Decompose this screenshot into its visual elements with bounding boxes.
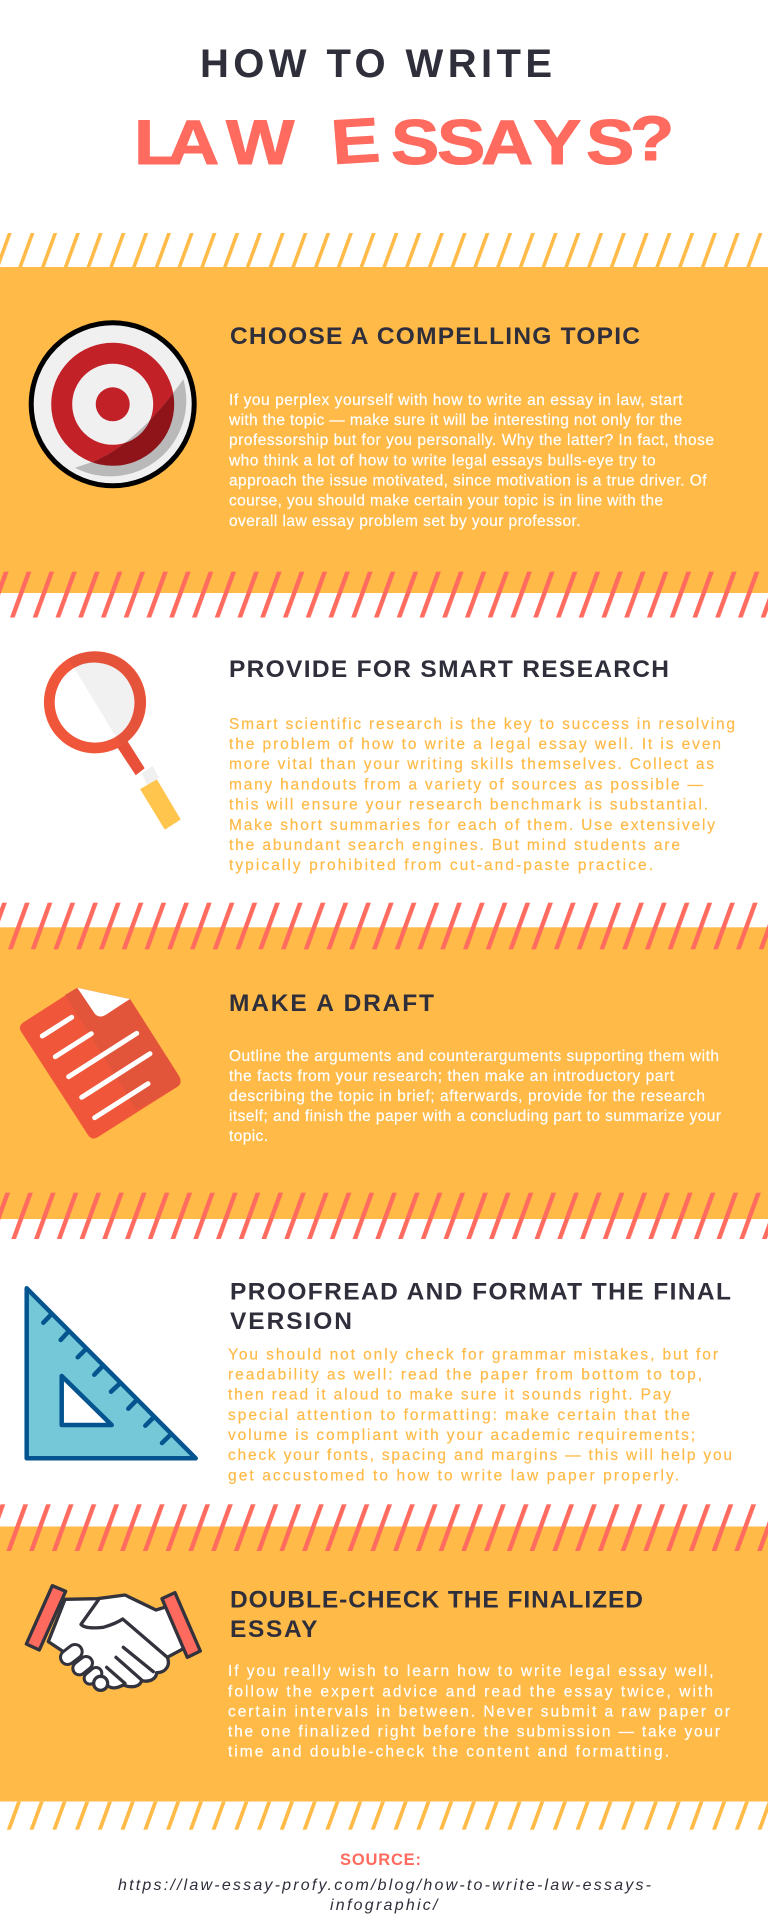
heading: PROVIDE FOR SMART RESEARCH [229,656,669,683]
body text [229,1048,721,1145]
icon: target [30,320,200,490]
icon: document [20,988,181,1139]
body text: Smart scientific research is the key to success in resolving [229,716,735,733]
icon: magnifying glass [49,657,180,829]
panel: make a draft [0,927,768,1219]
body text: the abundant search engines. But mind students are [229,837,680,854]
body text: more vital than your writing skills themselves. Collect as [229,756,714,773]
panel: proofread and format [27,1278,732,1484]
body text: You should not only check for grammar mistakes, but for [228,1346,718,1364]
body text: readability as well: read the paper from bottom to top, [228,1366,702,1384]
panel: provide for smart research [49,656,735,874]
body text: typically prohibited from cut-and-paste practice. [229,857,653,874]
title [134,42,674,178]
body text: If you really wish to learn how to write legal essay well, [228,1663,714,1680]
body text: special attention to formatting: make certain that the [228,1407,690,1424]
body text: then read it aloud to make sure it sounds right. Pay [228,1386,671,1404]
body text: who think a lot of how to write legal essays bulls-eye try to [228,452,656,470]
heading: PROOFREAD AND FORMAT THE FINAL [230,1278,731,1306]
body text [228,1663,730,1760]
source url: https://law-essay-profy.com/blog/how-to-write-law-essays- [118,1877,651,1894]
heading: MAKE A DRAFT [229,990,434,1017]
body text: this will ensure your research benchmark is substantial. [229,796,708,814]
body text: volume is compliant with your academic requirements; [228,1427,695,1444]
body text [229,716,735,874]
body text: overall law essay problem set by your professor. [229,513,581,530]
heading: CHOOSE A COMPELLING TOPIC [230,323,640,350]
body text: If you perplex yourself with how to write an essay in law, start [229,392,683,409]
title line: law essays: LAW ESSAYS? [134,104,674,178]
body text [228,392,714,530]
panel: choose a compelling topic [0,267,768,593]
body text: itself; and finish the paper with a concluding part to summarize your [229,1108,721,1125]
source label: SOURCE: [340,1851,421,1869]
body text: get accustomed to how to write law paper properly. [228,1468,679,1484]
body text: the facts from your research; then make an introductory part [229,1068,675,1085]
source url: infographic/ [330,1897,439,1914]
icon: handshake [26,1586,200,1690]
body text: Outline the arguments and counterarguments supporting them with [229,1048,719,1065]
body text: the one finalized right before the submission — take your [228,1724,720,1740]
body text: course, you should make certain your topic is in line with the [229,492,663,510]
body text: check your fonts, spacing and margins — this will help you [228,1447,732,1464]
panel: double-check [0,1526,768,1802]
heading [230,1587,643,1643]
title line: how to write: HOW TO WRITE [200,42,552,86]
body text: time and double-check the content and formatting. [228,1744,669,1760]
icon: set square [27,1288,196,1458]
body text: Make short summaries for each of them. Use extensively [229,817,715,834]
heading: VERSION [230,1308,352,1335]
heading: DOUBLE-CHECK THE FINALIZED [230,1587,643,1614]
body text: describing the topic in brief; afterwards, provide for the research [229,1088,705,1105]
heading: ESSAY [230,1616,318,1643]
heading [230,1278,731,1335]
body text: many handouts from a variety of sources as possible — [229,776,704,794]
body text [228,1346,732,1484]
body text: topic. [229,1128,268,1145]
body text: with the topic — make sure it will be interesting not only for the [228,412,682,429]
source url [118,1877,651,1914]
body text: approach the issue motivated, since motivation is a true driver. Of [229,472,707,490]
body text: follow the expert advice and read the essay twice, with [228,1684,713,1700]
body text: professorship but for you personally. Why the latter? In fact, those [229,432,714,449]
source [118,1851,651,1914]
body text: certain intervals in between. Never submit a raw paper or [228,1704,730,1720]
body text: the problem of how to write a legal essay well. It is even [229,736,721,753]
